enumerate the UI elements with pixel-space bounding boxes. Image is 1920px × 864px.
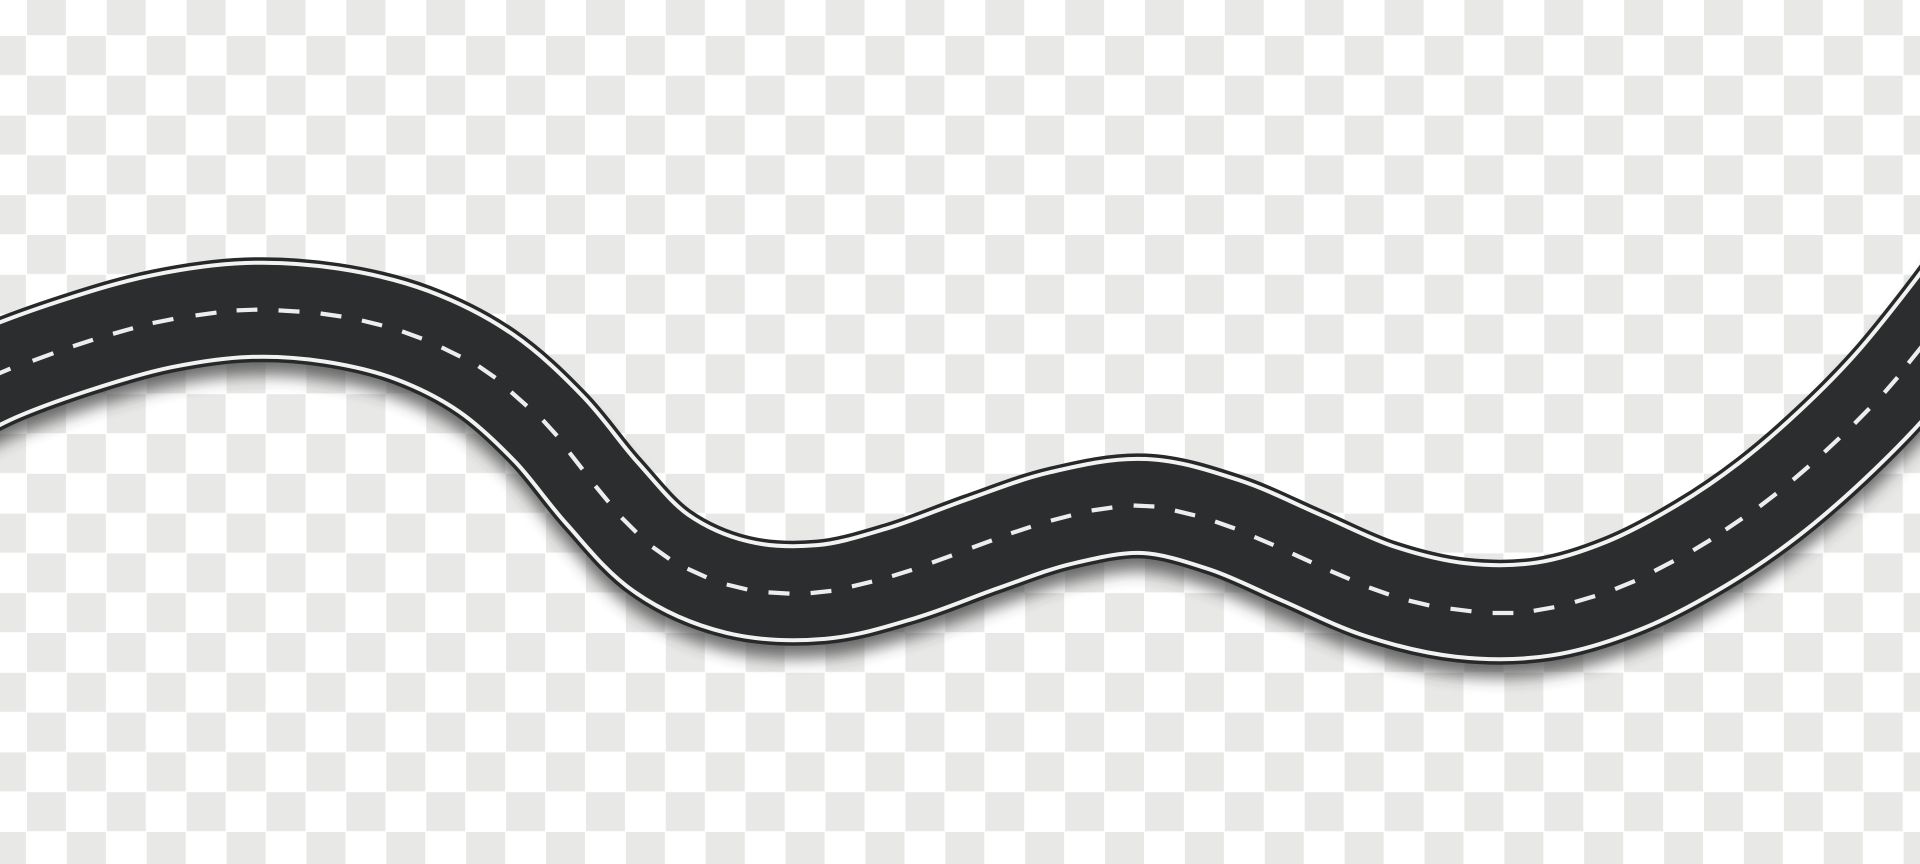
white edge lines [0, 230, 1920, 612]
dashed centre line [0, 310, 1920, 613]
road drop shadow [0, 246, 1920, 628]
asphalt surface [0, 230, 1920, 612]
winding asphalt road [0, 230, 1920, 613]
road outer edge [0, 230, 1920, 612]
